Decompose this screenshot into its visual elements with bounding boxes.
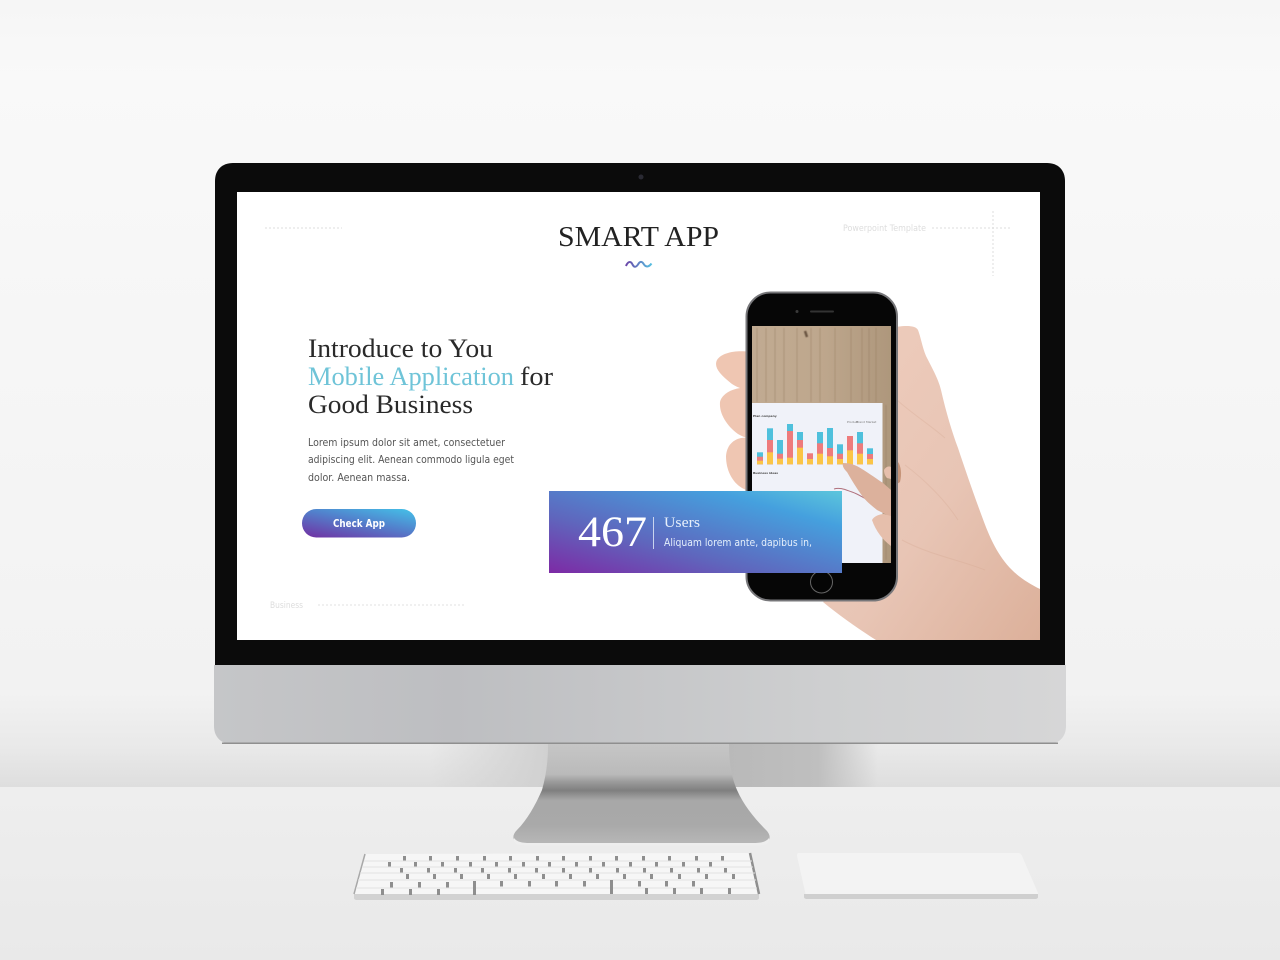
body text: Lorem ipsum dolor sit amet, consectetuer — [308, 436, 505, 449]
body text: adipiscing elit. Aenean commodo ligula eget — [308, 453, 515, 466]
photo: paper with chart — [752, 403, 891, 563]
chart labels — [753, 414, 877, 475]
body text: dolor. Aenean massa. — [308, 471, 410, 484]
palm creases — [897, 400, 985, 570]
bottom label: Business — [270, 601, 304, 611]
wall shadow — [430, 744, 878, 787]
webcam — [638, 174, 644, 180]
phone — [746, 292, 897, 600]
knuckle — [884, 466, 891, 479]
wave ornament — [626, 262, 652, 267]
pointing finger — [843, 463, 891, 517]
line chart fragment — [834, 488, 866, 499]
stat label: Users — [664, 515, 700, 531]
slide screen — [237, 192, 1040, 640]
stacked bar chart — [757, 424, 873, 464]
key gaps — [381, 856, 735, 895]
heading: Introduce to You — [308, 334, 493, 363]
stat card — [549, 491, 842, 573]
chart labels: Brand — [856, 420, 865, 424]
second finger — [872, 514, 891, 546]
monitor chin — [214, 665, 1066, 744]
trackpad — [797, 853, 1038, 899]
hand holding phone — [716, 326, 1040, 640]
chart labels: Product — [847, 420, 859, 424]
thumb crease — [897, 462, 901, 484]
stat number: 467 — [578, 509, 647, 556]
chart labels: Business ideas — [753, 471, 778, 475]
base lip — [514, 838, 769, 846]
dashed cross top right — [932, 211, 1010, 276]
home button — [810, 571, 832, 593]
heading — [308, 334, 553, 419]
earpiece and camera — [796, 310, 834, 313]
monitor stand — [430, 744, 878, 846]
stand body — [513, 744, 770, 843]
keyboard — [354, 853, 759, 900]
stat description: Aliquam lorem ante, dapibus in, — [664, 537, 812, 549]
desk surface — [0, 787, 1280, 960]
dashed line bottom — [318, 604, 464, 606]
monitor — [214, 163, 1066, 744]
heading: Good Business — [308, 390, 473, 419]
button: check app — [302, 509, 416, 538]
dashed line top left — [265, 227, 342, 229]
body text — [308, 436, 515, 484]
chart labels: Market — [866, 420, 877, 424]
hand back — [823, 326, 1040, 640]
phone body — [746, 292, 897, 600]
key rows — [356, 861, 757, 888]
title: SMART APP — [558, 221, 719, 253]
button: check app: Check App — [333, 518, 385, 530]
heading: Mobile Application — [308, 362, 514, 391]
photo: wood table — [752, 326, 891, 563]
monitor bezel — [215, 163, 1065, 666]
fingers — [716, 351, 750, 492]
top right label: Powerpoint Template — [843, 224, 926, 234]
chart labels: Plan company — [753, 414, 777, 418]
heading: for — [520, 362, 553, 391]
